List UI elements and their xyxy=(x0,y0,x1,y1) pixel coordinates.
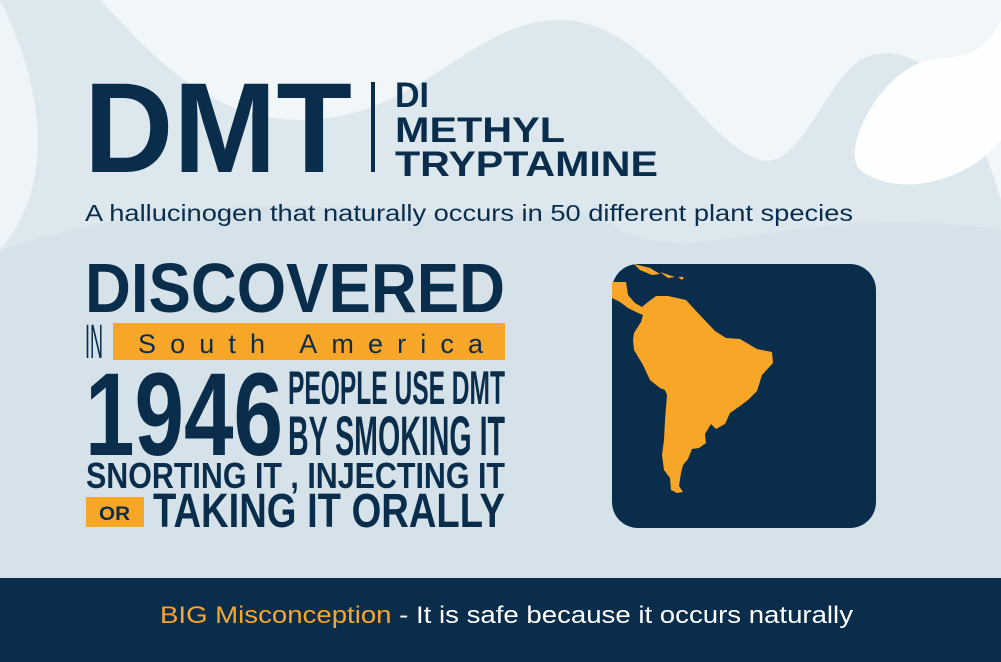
usage text: PEOPLE USE DMT xyxy=(288,361,505,414)
bottom banner: BIG Misconception - It is safe because it occurs naturally xyxy=(160,602,853,629)
subtitle: A hallucinogen that naturally occurs in 50 different plant species xyxy=(85,200,853,226)
DISCOVERED: DISCOVERED xyxy=(85,249,505,327)
TAKING IT ORALLY: TAKING IT ORALLY xyxy=(153,485,505,538)
usage text: SNORTING IT , INJECTING IT xyxy=(86,455,505,496)
OR box: OR xyxy=(99,504,130,525)
divider bar xyxy=(371,82,375,172)
map panel xyxy=(612,264,876,528)
icon: south america map xyxy=(612,264,773,493)
text: IN xyxy=(85,316,103,369)
OR box xyxy=(86,497,144,527)
year 1946: 1946 xyxy=(85,349,283,481)
title expansion xyxy=(395,76,658,184)
title expansion: TRYPTAMINE xyxy=(395,145,658,184)
title expansion: METHYL xyxy=(395,111,565,150)
bottom banner xyxy=(0,578,1001,662)
title expansion: DI xyxy=(395,76,429,115)
title: DMT: DMT xyxy=(84,57,352,200)
usage text xyxy=(86,361,505,496)
usage text: BY SMOKING IT xyxy=(288,404,505,467)
South America box: South America xyxy=(138,329,484,359)
